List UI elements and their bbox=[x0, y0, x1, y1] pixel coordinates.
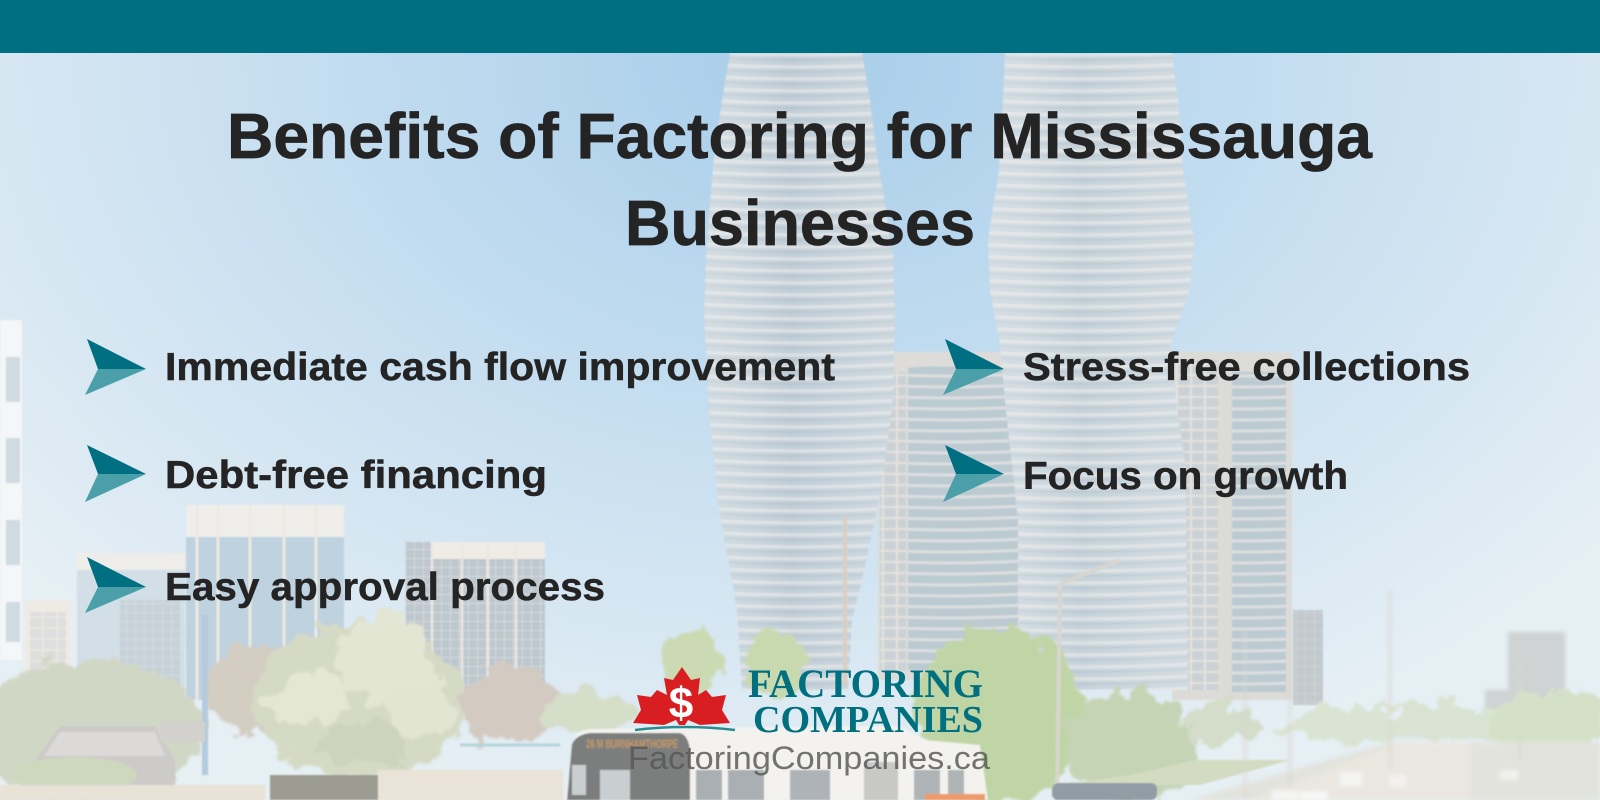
benefit: stress-free collections bbox=[943, 339, 1470, 395]
street furniture and vehicles bbox=[0, 560, 1290, 800]
title bbox=[227, 100, 1372, 259]
website URL: FactoringCompanies.ca bbox=[628, 740, 990, 776]
benefit: immediate cash flow improvement bbox=[85, 339, 835, 395]
benefit: easy approval process: Easy approval process bbox=[165, 566, 605, 609]
left skyline buildings bbox=[0, 320, 545, 707]
trees and foliage bbox=[0, 625, 1600, 800]
flowering tree bbox=[255, 618, 465, 778]
benefit: focus on growth: Focus on growth bbox=[1023, 455, 1348, 498]
benefits list: right column bbox=[943, 339, 1470, 502]
benefit: easy approval process bbox=[85, 557, 605, 613]
benefit: debt-free financing bbox=[85, 445, 547, 502]
logo: Factoring Companies bbox=[633, 661, 983, 741]
Absolute towers and neighbouring buildings bbox=[704, 53, 1323, 705]
benefit: immediate cash flow improvement: Immediate cash flow improvement bbox=[165, 346, 835, 389]
benefit: focus on growth bbox=[943, 445, 1348, 502]
distant right skyline bbox=[1358, 632, 1565, 740]
road bbox=[1190, 590, 1600, 800]
title: Businesses bbox=[625, 187, 975, 259]
title: Benefits of Factoring for Mississauga bbox=[227, 100, 1372, 172]
icon: red maple leaf with dollar sign: $ bbox=[669, 679, 693, 728]
bus bbox=[565, 726, 988, 800]
benefits list: left column bbox=[85, 339, 835, 613]
benefit: stress-free collections: Stress-free collections bbox=[1023, 346, 1470, 389]
logo: Factoring Companies: COMPANIES bbox=[753, 699, 983, 741]
benefit: debt-free financing: Debt-free financing bbox=[165, 454, 547, 497]
bus: 26 M BURNHAMTHORPE bbox=[586, 737, 678, 751]
top teal banner bbox=[0, 0, 1600, 53]
logo: Factoring Companies: FACTORING bbox=[748, 661, 983, 706]
icon: red maple leaf with dollar sign bbox=[633, 667, 735, 730]
